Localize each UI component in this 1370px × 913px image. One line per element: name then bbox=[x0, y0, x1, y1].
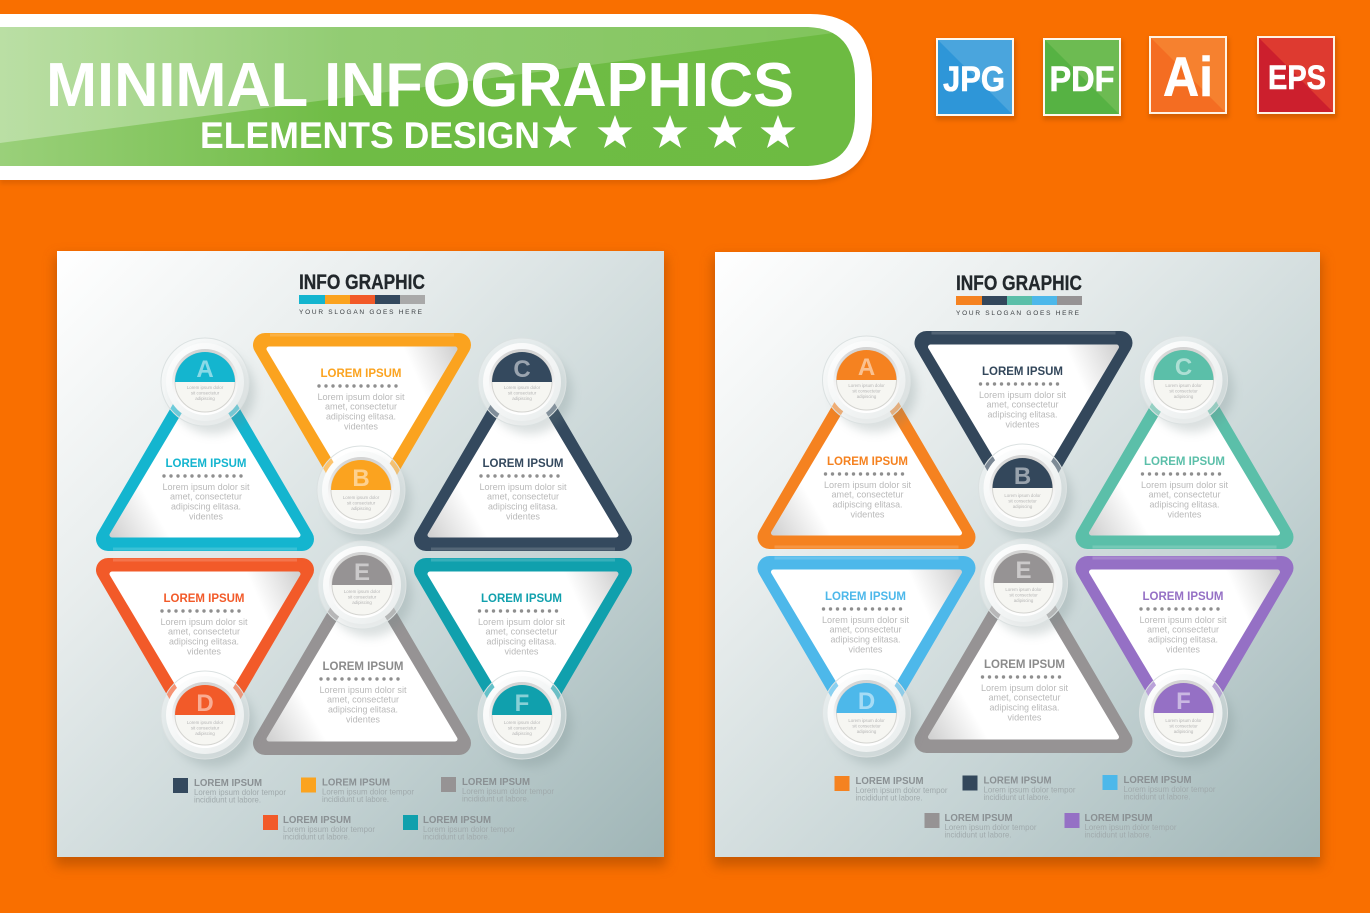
badge D bbox=[161, 671, 255, 767]
legend item 4: Lorem ipsum dolor tempor bbox=[283, 825, 375, 834]
badge E: adipiscing bbox=[1014, 598, 1034, 603]
badge D: D bbox=[858, 688, 875, 715]
badge F: Lorem ipsum dolor bbox=[1165, 718, 1202, 723]
legend item 2 bbox=[962, 776, 1076, 802]
triangle A bbox=[108, 373, 302, 549]
badge C: Lorem ipsum dolor bbox=[1165, 383, 1202, 388]
text block E: adipiscing elitasa. bbox=[328, 704, 398, 714]
text block F: videntes bbox=[1166, 644, 1200, 654]
banner title: MINIMAL INFOGRAPHICS bbox=[46, 51, 794, 120]
icon: Ai: Ai bbox=[1163, 45, 1213, 108]
badge F: Lorem ipsum dolor bbox=[504, 720, 541, 725]
text block E: LOREM IPSUM bbox=[984, 659, 1065, 671]
legend bbox=[173, 777, 554, 842]
legend item 4 bbox=[263, 815, 375, 842]
badge C: C bbox=[513, 356, 531, 383]
text block B: amet, consectetur bbox=[325, 402, 397, 412]
text block D: amet, consectetur bbox=[830, 624, 902, 634]
text block A: Lorem ipsum dolor sit bbox=[824, 480, 911, 490]
text block E: videntes bbox=[1008, 712, 1042, 722]
text block A bbox=[824, 456, 911, 520]
text block F bbox=[478, 593, 565, 656]
legend bbox=[834, 775, 1216, 840]
text block A: LOREM IPSUM bbox=[827, 456, 908, 468]
badge D bbox=[822, 669, 916, 765]
banner bbox=[0, 14, 872, 184]
badge D: adipiscing bbox=[857, 729, 877, 734]
text block C: amet, consectetur bbox=[1148, 490, 1220, 500]
badge B bbox=[317, 446, 411, 542]
badge D: adipiscing bbox=[195, 731, 215, 736]
legend item 1: Lorem ipsum dolor tempor bbox=[194, 788, 286, 797]
text block E bbox=[981, 659, 1068, 722]
badge E: E bbox=[354, 559, 370, 586]
text block A: LOREM IPSUM bbox=[166, 458, 246, 470]
text block E: amet, consectetur bbox=[327, 694, 399, 704]
triangle D bbox=[108, 560, 302, 736]
badge B: B bbox=[1014, 463, 1031, 490]
legend item 2: LOREM IPSUM bbox=[322, 778, 390, 788]
badge B: sit consectetur bbox=[347, 500, 376, 506]
badge F bbox=[1140, 669, 1234, 765]
icon: PDF: PDF bbox=[1050, 60, 1114, 99]
text block A: videntes bbox=[850, 510, 885, 520]
legend item 2: Lorem ipsum dolor tempor bbox=[984, 786, 1076, 794]
badge C: adipiscing bbox=[512, 396, 532, 401]
badge E: sit consectetur bbox=[1009, 592, 1038, 598]
text block C: amet, consectetur bbox=[487, 492, 559, 502]
text block C: LOREM IPSUM bbox=[1144, 456, 1225, 468]
text block B: adipiscing elitasa. bbox=[326, 412, 396, 422]
banner subtitle: ELEMENTS DESIGN bbox=[200, 115, 540, 156]
panel: right infographic bbox=[713, 252, 1322, 866]
triangle C bbox=[1088, 371, 1282, 547]
left header: YOUR SLOGAN GOES HERE bbox=[299, 309, 423, 316]
legend item 1: LOREM IPSUM bbox=[856, 776, 924, 787]
text block A: videntes bbox=[189, 512, 223, 522]
triangle B bbox=[265, 335, 459, 511]
triangle F bbox=[1088, 558, 1282, 734]
legend item 3: LOREM IPSUM bbox=[1124, 775, 1192, 786]
text block B: amet, consectetur bbox=[986, 400, 1058, 410]
badge D: sit consectetur bbox=[191, 726, 220, 730]
legend item 1 bbox=[173, 778, 286, 804]
badge F: sit consectetur bbox=[508, 726, 537, 730]
legend item 1: Lorem ipsum dolor tempor bbox=[856, 786, 948, 795]
badge F: adipiscing bbox=[1174, 729, 1194, 734]
legend item 2: LOREM IPSUM bbox=[984, 776, 1052, 786]
legend item 5: Lorem ipsum dolor tempor bbox=[1084, 823, 1177, 832]
legend item 5 bbox=[1064, 813, 1177, 840]
text block E: videntes bbox=[346, 714, 380, 724]
triangle D bbox=[770, 558, 964, 734]
text block D: adipiscing elitasa. bbox=[830, 634, 900, 644]
badge F bbox=[478, 671, 572, 767]
legend item 5 bbox=[403, 815, 515, 842]
legend item 3 bbox=[441, 777, 554, 804]
icon: JPG bbox=[936, 39, 1016, 120]
legend item 4: LOREM IPSUM bbox=[944, 813, 1012, 824]
badge E bbox=[318, 541, 412, 637]
legend item 5: Lorem ipsum dolor tempor bbox=[423, 825, 515, 834]
icon: EPS bbox=[1257, 37, 1337, 118]
text block B: adipiscing elitasa. bbox=[988, 410, 1058, 420]
text block F: LOREM IPSUM bbox=[1142, 591, 1224, 603]
text block F: Lorem ipsum dolor sit bbox=[478, 617, 565, 627]
badge B: sit consectetur bbox=[1008, 498, 1037, 504]
right header: YOUR SLOGAN GOES HERE bbox=[956, 310, 1080, 317]
text block D: LOREM IPSUM bbox=[825, 591, 906, 603]
legend item 4: LOREM IPSUM bbox=[283, 815, 351, 826]
badge A: Lorem ipsum dolor bbox=[848, 383, 885, 388]
text block F bbox=[1140, 591, 1227, 654]
badge E bbox=[980, 539, 1074, 635]
right header bbox=[956, 272, 1082, 317]
legend item 2: incididunt ut labore. bbox=[984, 793, 1050, 802]
legend item 3 bbox=[1102, 775, 1216, 802]
legend item 5: incididunt ut labore. bbox=[1084, 830, 1152, 840]
icon: JPG: JPG bbox=[943, 60, 1005, 99]
legend item 1: LOREM IPSUM bbox=[194, 778, 262, 789]
left header bbox=[299, 271, 425, 316]
text block B: LOREM IPSUM bbox=[320, 368, 402, 380]
badge B: adipiscing bbox=[351, 506, 371, 511]
text block F: amet, consectetur bbox=[1147, 624, 1219, 634]
badge D: D bbox=[196, 690, 214, 717]
text block C: LOREM IPSUM bbox=[482, 458, 564, 470]
text block B: videntes bbox=[1006, 420, 1040, 430]
triangle E bbox=[926, 575, 1120, 741]
right diagram bbox=[770, 333, 1282, 840]
text block A: adipiscing elitasa. bbox=[832, 500, 902, 510]
text block C bbox=[1141, 456, 1228, 520]
left header: INFO GRAPHIC bbox=[299, 271, 425, 294]
panel: left infographic bbox=[55, 251, 666, 866]
badge F: adipiscing bbox=[512, 731, 532, 736]
badge A bbox=[822, 336, 916, 432]
text block A: amet, consectetur bbox=[170, 492, 242, 502]
text block B: LOREM IPSUM bbox=[982, 366, 1063, 378]
triangle A bbox=[770, 371, 964, 547]
text block D: Lorem ipsum dolor sit bbox=[160, 617, 248, 627]
triangle E bbox=[265, 577, 459, 743]
text block B: videntes bbox=[344, 422, 378, 432]
badge C: sit consectetur bbox=[508, 390, 537, 396]
text block C: adipiscing elitasa. bbox=[488, 502, 558, 512]
badge C: C bbox=[1175, 354, 1192, 381]
badge F: F bbox=[515, 690, 529, 717]
badge D: Lorem ipsum dolor bbox=[187, 720, 224, 725]
text block F: Lorem ipsum dolor sit bbox=[1140, 615, 1227, 625]
text block F: adipiscing elitasa. bbox=[486, 636, 556, 646]
badge A: sit consectetur bbox=[191, 390, 220, 396]
text block C: adipiscing elitasa. bbox=[1150, 500, 1220, 510]
badge A: Lorem ipsum dolor bbox=[187, 385, 224, 390]
text block F: videntes bbox=[504, 646, 539, 656]
text block E bbox=[320, 661, 407, 724]
legend item 5: LOREM IPSUM bbox=[1084, 813, 1152, 824]
icon: PDF bbox=[1043, 39, 1123, 120]
badge F: F bbox=[1176, 688, 1191, 715]
text block D bbox=[822, 591, 909, 654]
badge C bbox=[1140, 336, 1234, 432]
right header: INFO GRAPHIC bbox=[956, 272, 1082, 295]
legend item 3: Lorem ipsum dolor tempor bbox=[462, 787, 554, 796]
text block B bbox=[318, 368, 405, 432]
badge A: sit consectetur bbox=[852, 388, 881, 394]
badge C: adipiscing bbox=[1174, 394, 1194, 399]
badge B: B bbox=[352, 465, 370, 492]
text block F: amet, consectetur bbox=[486, 626, 558, 636]
badge B bbox=[978, 444, 1072, 540]
icon: Ai bbox=[1149, 37, 1229, 118]
legend item 1: incididunt ut labore. bbox=[194, 796, 261, 804]
legend item 1: incididunt ut labore. bbox=[856, 794, 922, 802]
legend item 4 bbox=[924, 813, 1037, 840]
triangle C bbox=[426, 373, 620, 549]
badge A: A bbox=[196, 356, 214, 383]
badge C: sit consectetur bbox=[1169, 388, 1198, 394]
text block A bbox=[162, 458, 250, 522]
text block C: Lorem ipsum dolor sit bbox=[480, 482, 567, 492]
text block E: adipiscing elitasa. bbox=[990, 702, 1060, 712]
badge D: sit consectetur bbox=[852, 724, 881, 728]
badge D: Lorem ipsum dolor bbox=[848, 718, 885, 723]
text block E: LOREM IPSUM bbox=[322, 661, 404, 673]
badge E: adipiscing bbox=[352, 600, 372, 605]
badge C: Lorem ipsum dolor bbox=[504, 385, 541, 390]
text block E: Lorem ipsum dolor sit bbox=[320, 685, 407, 695]
icon: EPS: EPS bbox=[1268, 59, 1326, 97]
text block C: videntes bbox=[1168, 510, 1202, 520]
text block A: amet, consectetur bbox=[832, 490, 904, 500]
text block B: Lorem ipsum dolor sit bbox=[979, 390, 1066, 400]
triangle B bbox=[926, 333, 1120, 509]
badge E: sit consectetur bbox=[348, 594, 377, 600]
badge B: Lorem ipsum dolor bbox=[343, 495, 380, 500]
badge F: sit consectetur bbox=[1169, 724, 1198, 728]
text block C: videntes bbox=[506, 512, 540, 522]
badge A: adipiscing bbox=[857, 394, 877, 399]
badge A: adipiscing bbox=[195, 396, 215, 401]
legend item 3: Lorem ipsum dolor tempor bbox=[1124, 785, 1216, 794]
legend item 5: LOREM IPSUM bbox=[423, 815, 491, 826]
text block C bbox=[480, 458, 567, 522]
text block B: Lorem ipsum dolor sit bbox=[318, 392, 405, 402]
badge E: E bbox=[1015, 557, 1032, 584]
legend item 3: incididunt ut labore. bbox=[462, 794, 529, 804]
legend item 4: Lorem ipsum dolor tempor bbox=[944, 823, 1037, 832]
triangle F bbox=[426, 560, 620, 736]
text block F: LOREM IPSUM bbox=[481, 593, 562, 605]
text block E: amet, consectetur bbox=[988, 692, 1060, 702]
text block F: adipiscing elitasa. bbox=[1148, 634, 1218, 644]
badge A bbox=[161, 338, 255, 434]
legend item 3: incididunt ut labore. bbox=[1124, 792, 1190, 802]
text block A: adipiscing elitasa. bbox=[171, 502, 241, 512]
text block D: LOREM IPSUM bbox=[164, 593, 244, 605]
legend item 5: incididunt ut labore. bbox=[423, 832, 490, 842]
badge B: adipiscing bbox=[1013, 504, 1033, 509]
text block B bbox=[979, 366, 1066, 430]
legend item 4: incididunt ut labore. bbox=[944, 830, 1012, 840]
badge E: Lorem ipsum dolor bbox=[1005, 587, 1042, 592]
text block D bbox=[160, 593, 248, 656]
legend item 4: incididunt ut labore. bbox=[283, 832, 350, 842]
badge C bbox=[478, 338, 572, 434]
text block D: videntes bbox=[848, 644, 883, 654]
text block C: Lorem ipsum dolor sit bbox=[1141, 480, 1228, 490]
badge B: Lorem ipsum dolor bbox=[1004, 493, 1041, 498]
badge A: A bbox=[858, 354, 875, 381]
text block A: Lorem ipsum dolor sit bbox=[162, 482, 250, 492]
legend item 1 bbox=[834, 776, 948, 802]
text block D: Lorem ipsum dolor sit bbox=[822, 615, 909, 625]
text block E: Lorem ipsum dolor sit bbox=[981, 683, 1068, 693]
legend item 2 bbox=[301, 778, 414, 804]
rating stars bbox=[542, 115, 796, 148]
legend item 3: LOREM IPSUM bbox=[462, 777, 530, 788]
text block D: amet, consectetur bbox=[168, 626, 240, 636]
text block D: adipiscing elitasa. bbox=[169, 636, 239, 646]
badge E: Lorem ipsum dolor bbox=[344, 589, 381, 594]
legend item 2: Lorem ipsum dolor tempor bbox=[322, 788, 414, 796]
text block D: videntes bbox=[187, 646, 221, 656]
legend item 2: incididunt ut labore. bbox=[322, 795, 389, 804]
